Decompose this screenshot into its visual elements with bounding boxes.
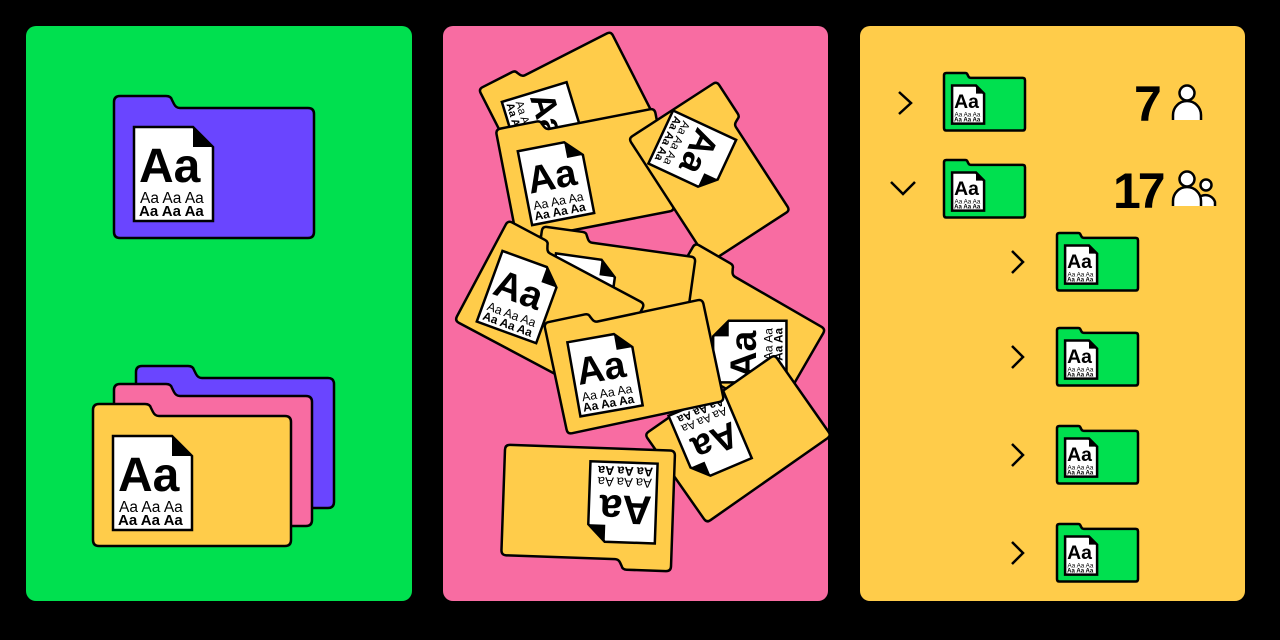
folder: purple single: [114, 96, 314, 238]
scattered folder 1: [479, 24, 653, 180]
scattered folder 8: [544, 290, 724, 434]
subfolder rows: Aa Aa Aa: [1068, 464, 1094, 471]
row 1: collapsed folder, 7 members: Aa Aa Aa: [955, 111, 981, 118]
scattered folder 8: Aa: [573, 343, 629, 394]
scattered folder 7: Aa Aa Aa: [675, 395, 725, 425]
scattered folder 3: Aa: [671, 123, 727, 181]
subfolder rows: Aa Aa Aa: [1067, 569, 1094, 575]
row 2: expanded folder, 17 members: [891, 160, 1215, 219]
scattered folder 6: Aa Aa Aa: [485, 299, 538, 330]
subfolder rows: Aa: [1067, 346, 1092, 368]
row 2: expanded folder, 17 members: Aa Aa Aa: [955, 198, 981, 205]
doc: font specimen: Aa Aa Aa: [140, 190, 204, 207]
subfolder rows: Aa Aa Aa: [1068, 366, 1094, 373]
doc: font specimen: Aa: [139, 140, 201, 193]
row 2: expanded folder, 17 members: Aa: [954, 178, 979, 200]
scattered folder 2: [496, 99, 674, 241]
scattered folder 9: Aa Aa Aa: [597, 463, 653, 480]
scattered folder 1: Aa Aa Aa: [503, 102, 529, 151]
subfolder rows: Aa Aa Aa: [1067, 278, 1094, 284]
scattered folder 9: Aa: [598, 486, 652, 534]
folder stack: purple, pink, yellow: Aa: [118, 449, 180, 502]
scattered folder 5: Aa Aa Aa: [773, 328, 786, 378]
scattered folder 5: [639, 243, 830, 418]
row 2: expanded folder, 17 members: Aa Aa Aa: [954, 205, 981, 211]
row 2: expanded folder, 17 members: 17: [1113, 163, 1164, 219]
scattered folder 1: Aa Aa Aa: [513, 100, 538, 148]
scattered folder 4: Aa Aa Aa: [550, 313, 602, 333]
subfolder rows: Aa Aa Aa: [1068, 271, 1094, 278]
scattered folder 5: Aa: [722, 329, 764, 378]
panel: green single folder vs stack: [26, 26, 412, 601]
scattered folder 7: Aa Aa Aa: [679, 404, 729, 435]
subfolder rows: Aa Aa Aa: [1067, 373, 1094, 379]
scattered folder 4: Aa: [553, 263, 607, 311]
scattered folder 9: Aa Aa Aa: [597, 474, 652, 491]
scattered folder 2: Aa Aa Aa: [532, 190, 585, 213]
scattered folder 6: [455, 220, 649, 396]
folder stack: purple, pink, yellow: [93, 366, 334, 546]
scattered folder 9: [501, 445, 675, 571]
folder stack: purple, pink, yellow: Aa Aa Aa: [118, 512, 183, 529]
subfolder rows: Aa Aa Aa: [1068, 562, 1094, 569]
panel: yellow folder tree with members: [860, 26, 1245, 601]
subfolder rows: [1012, 233, 1138, 582]
scattered folder 1: Aa: [522, 88, 572, 142]
scattered folder 4: Aa Aa Aa: [552, 302, 603, 323]
scattered folder 8: Aa Aa Aa: [582, 392, 636, 415]
scattered folder 5: Aa Aa Aa: [761, 328, 775, 378]
scattered folder 3: Aa Aa Aa: [660, 119, 691, 167]
row 1: collapsed folder, 7 members: 7: [1134, 76, 1160, 132]
subfolder rows: Aa: [1067, 444, 1092, 466]
scattered folder 4: [527, 226, 697, 358]
scattered folder 6: Aa: [488, 262, 550, 319]
row 1: collapsed folder, 7 members: Aa Aa Aa: [954, 118, 981, 124]
scattered folder 2: Aa Aa Aa: [533, 200, 587, 223]
scattered folder 3: [629, 81, 797, 263]
scattered folder 3: Aa Aa Aa: [652, 114, 683, 163]
subfolder rows: Aa: [1067, 542, 1092, 564]
scattered folder 7: [644, 346, 831, 523]
doc: font specimen: [134, 127, 213, 221]
scattered folder 2: Aa: [524, 151, 581, 203]
doc: font specimen: Aa Aa Aa: [139, 203, 204, 220]
scattered folder 8: Aa Aa Aa: [581, 382, 634, 404]
subfolder rows: Aa Aa Aa: [1067, 471, 1094, 477]
folder stack: purple, pink, yellow: Aa Aa Aa: [119, 499, 183, 516]
panel: pink scattered folders: [443, 24, 831, 601]
subfolder rows: Aa: [1067, 251, 1092, 273]
row 1: collapsed folder, 7 members: Aa: [954, 91, 979, 113]
scattered folder 7: Aa: [685, 414, 745, 470]
scattered folder 6: Aa Aa Aa: [481, 309, 535, 340]
row 1: collapsed folder, 7 members: [899, 73, 1201, 132]
